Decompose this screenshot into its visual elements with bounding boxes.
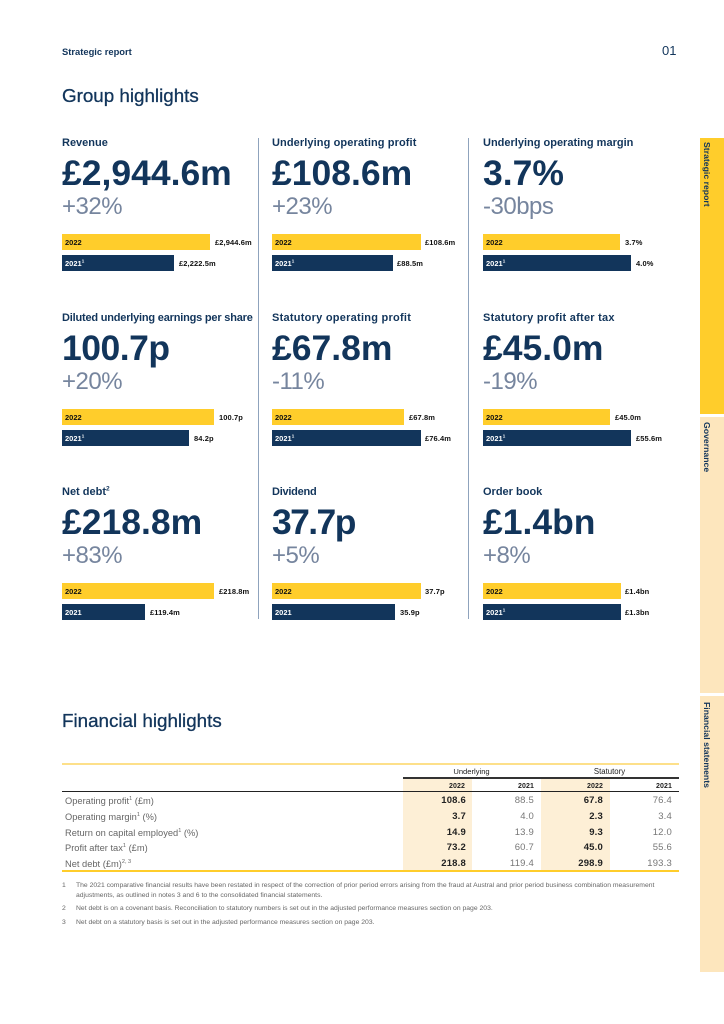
panel: statutory profit after tax: £55.6m	[636, 434, 662, 442]
table column headers: 2022	[587, 783, 603, 790]
panel: net debt: £218.8m	[62, 502, 202, 542]
side tab label: Governance: Governance	[702, 422, 712, 472]
panel: order book: +8%	[483, 542, 530, 568]
panel: order book: £1.4bn	[625, 586, 649, 596]
panel: statutory profit after tax: £45.0m	[483, 328, 603, 368]
table row: profit after tax: 45.0	[584, 842, 603, 853]
side tab: Strategic report	[700, 138, 724, 414]
table group header: Underlying: Underlying	[453, 767, 490, 776]
panel: statutory profit after tax: 20211	[486, 433, 505, 442]
table row: operating profit: Operating profit1 (£m)	[65, 796, 154, 806]
footnotes	[62, 882, 654, 926]
panel: statutory profit after tax	[483, 312, 662, 446]
table group header: Statutory: Statutory	[594, 767, 625, 776]
table row: operating margin: Operating margin1 (%)	[65, 812, 157, 822]
table row: net debt: Net debt (£m)2, 3	[65, 859, 131, 869]
panel: net debt: £218.8m	[219, 586, 249, 596]
panel: net debt	[62, 485, 249, 620]
panel: underlying operating profit: +23%	[272, 193, 332, 220]
panel: diluted underlying EPS: +20%	[62, 368, 122, 394]
table row: operating profit: 67.8	[584, 795, 603, 806]
panel: order book: 20211	[486, 607, 505, 616]
panel: revenue: £2,222.5m	[179, 259, 216, 268]
page number: 01	[662, 43, 676, 58]
panel: diluted underlying EPS	[62, 312, 253, 446]
footnotes: 3	[62, 919, 66, 926]
panel: underlying operating profit: £108.6m	[272, 153, 412, 193]
section label: Strategic report: Strategic report	[62, 46, 132, 57]
panel: statutory profit after tax: -19%	[483, 368, 537, 394]
panel: statutory profit after tax: £45.0m	[615, 412, 641, 422]
panel: underlying operating margin: 2022	[486, 238, 503, 247]
side tab: Financial statements	[700, 696, 724, 972]
table column headers: 2022	[449, 783, 465, 790]
panel: dividend: +5%	[272, 542, 319, 568]
footnotes: adjustments, as outlined in notes 3 and 6 to the consolidated financial statements.	[76, 892, 322, 899]
table row: return on capital employed: 14.9	[447, 826, 466, 838]
table row: net debt: 193.3	[647, 858, 672, 869]
side tab label: Strategic report: Strategic report	[702, 142, 712, 207]
panel: diluted underlying EPS: 20211	[65, 433, 84, 442]
table row: operating profit: 76.4	[653, 795, 672, 806]
table row: profit after tax: 73.2	[447, 842, 466, 853]
panel: diluted underlying EPS: 100.7p	[219, 412, 243, 422]
panel: underlying operating margin: Underlying operating margin	[483, 137, 633, 149]
panel: underlying operating profit: 20211	[275, 258, 294, 268]
panel: order book: £1.4bn	[483, 502, 595, 542]
table row: profit after tax: 55.6	[653, 842, 672, 853]
panel: underlying operating profit: £88.5m	[397, 259, 423, 268]
panel: revenue: 2022	[65, 238, 82, 247]
table row: net debt: 298.9	[578, 858, 603, 869]
table row: operating margin: 3.7	[452, 811, 466, 822]
panel: dividend: 37.7p	[272, 502, 355, 542]
table: financial highlights	[62, 763, 679, 872]
panel: statutory profit after tax: 2022	[486, 412, 503, 422]
panel: revenue: £2,944.6m	[62, 153, 232, 193]
panel: statutory operating profit: 2022	[275, 412, 292, 422]
panel: dividend: 37.7p	[425, 586, 445, 596]
panel: dividend: 35.9p	[400, 608, 420, 616]
panel: revenue: 20211	[65, 258, 84, 268]
panel: underlying operating margin: -30bps	[483, 193, 553, 220]
panel: diluted underlying EPS: 2022	[65, 412, 82, 422]
panel: underlying operating profit: £108.6m	[425, 238, 455, 247]
footnotes: 2	[62, 905, 66, 912]
column divider right	[468, 138, 469, 619]
panel: diluted underlying EPS: 100.7p	[62, 328, 170, 368]
table row: profit after tax: 60.7	[515, 842, 534, 853]
panel: statutory operating profit: £76.4m	[425, 434, 451, 442]
panel: revenue: Revenue	[62, 137, 108, 149]
panel: dividend	[272, 486, 445, 620]
table row: net debt: 119.4	[510, 858, 534, 869]
panel: statutory operating profit	[272, 312, 451, 446]
footnotes: 1	[62, 882, 66, 889]
panel: underlying operating margin: 20211	[486, 258, 505, 268]
table column headers: 2021	[518, 783, 534, 790]
panel: revenue: £2,944.6m	[215, 238, 252, 247]
footnotes: Net debt is on a covenant basis. Reconciliation to statutory numbers is set out in the adjusted performance measures section on page 203.	[76, 905, 493, 912]
table row: profit after tax: Profit after tax1 (£m)	[65, 843, 148, 853]
table row: return on capital employed: 13.9	[515, 826, 534, 838]
panel: underlying operating profit	[272, 137, 455, 271]
panel: statutory operating profit: £67.8m	[409, 412, 435, 422]
panel: net debt: £119.4m	[150, 608, 180, 616]
panel: net debt: 2022	[65, 586, 82, 596]
panel: dividend: Dividend	[272, 486, 316, 498]
panel: underlying operating margin: 3.7%	[483, 153, 564, 193]
table row: operating margin: 4.0	[520, 811, 534, 822]
panel: diluted underlying EPS: 84.2p	[194, 434, 214, 442]
panel: underlying operating profit: Underlying operating profit	[272, 137, 416, 149]
table row: net debt: 218.8	[441, 858, 466, 869]
panel: underlying operating margin: 3.7%	[625, 238, 642, 247]
panel: order book: £1.3bn	[625, 608, 649, 616]
panel: underlying operating margin	[483, 137, 654, 271]
table row: return on capital employed: 9.3	[589, 826, 603, 838]
panel: statutory operating profit: 20211	[275, 433, 294, 442]
panel: net debt: +83%	[62, 542, 122, 568]
side tab label: Financial statements: Financial statements	[702, 702, 712, 788]
panel: revenue	[62, 137, 252, 271]
panel: order book: 2022	[486, 586, 503, 596]
heading: Group highlights: Group highlights	[62, 85, 199, 106]
table row: operating profit: 108.6	[441, 795, 466, 806]
column divider left	[258, 138, 259, 619]
table row: operating margin: 2.3	[589, 811, 603, 822]
panel: net debt: 2021	[65, 608, 82, 616]
panel: underlying operating profit: 2022	[275, 238, 292, 247]
footnotes: Net debt on a statutory basis is set out in the adjusted performance measures section on page 203.	[76, 919, 374, 926]
table row: return on capital employed: Return on capital employed1 (%)	[65, 827, 198, 838]
table column headers: 2021	[656, 783, 672, 790]
panel: diluted underlying EPS: Diluted underlying earnings per share	[62, 312, 253, 324]
heading: Financial highlights: Financial highlights	[62, 710, 222, 731]
panel: revenue: +32%	[62, 193, 122, 220]
table row: operating margin: 3.4	[658, 811, 672, 822]
panel: statutory operating profit: Statutory operating profit	[272, 312, 411, 324]
panel: dividend: 2021	[275, 608, 292, 616]
panel: statutory profit after tax: Statutory profit after tax	[483, 312, 615, 324]
panel: underlying operating margin: 4.0%	[636, 259, 654, 268]
panel: statutory operating profit: £67.8m	[272, 328, 392, 368]
table row: operating profit: 88.5	[515, 795, 534, 806]
panel: order book: Order book	[483, 486, 542, 498]
footnotes: The 2021 comparative financial results have been restated in respect of the correction of prior period errors arising from the fraud at Austral and prior period business combination measurement	[76, 882, 654, 889]
panel: dividend: 2022	[275, 586, 292, 596]
panel: order book	[483, 486, 649, 620]
side tab: Governance	[700, 417, 724, 693]
panel: net debt: Net debt2	[62, 485, 110, 498]
table row: return on capital employed: 12.0	[653, 826, 672, 838]
panel: statutory operating profit: -11%	[272, 368, 324, 394]
